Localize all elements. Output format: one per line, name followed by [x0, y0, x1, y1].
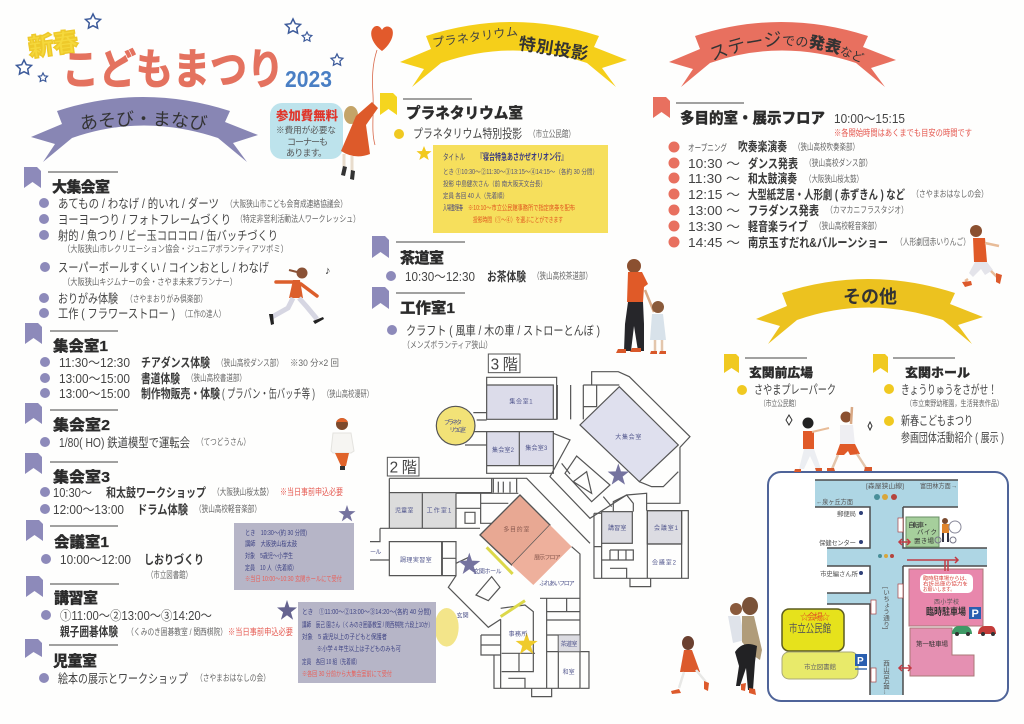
- section: jidoshitsu: 絵本の展示とワークショップ: [58, 672, 188, 686]
- floor plan 3F and 2F: プラネタ: [444, 419, 462, 427]
- section: planetarium room: [380, 93, 575, 141]
- section: shukaishitsu 3: ※当日事前申込必要: [280, 486, 343, 497]
- info box: planetarium: 『寝台特急あさかぜオリオン行』: [477, 151, 567, 162]
- illustration: boy with cap: [331, 418, 354, 470]
- floor plan 3F and 2F: 工作室1: [427, 507, 452, 515]
- info box 1: taiko workshop: ※当日 10:00～10:30 玄関ホールにて受付: [245, 574, 342, 583]
- section: stage schedule: 12:15 ～: [688, 188, 740, 202]
- access map: ←泉ヶ丘方面: [816, 497, 853, 506]
- info box: planetarium: 定員 各回 40 人（先着順）: [443, 191, 508, 200]
- section: stage schedule: （大阪狭山桜太鼓）: [805, 173, 863, 184]
- info box 2: igo class: ※各回 30 分前から大集会室前にて受付: [302, 669, 392, 678]
- section: shukaishitsu 3: （狭山高校軽音楽部）: [195, 503, 261, 514]
- section: daishukaishitsu: スーパーボールすくい / コインおとし / わなげ: [58, 261, 269, 275]
- section: genkan hall: 新春こどもまつり: [901, 414, 973, 428]
- ribbon: asobi manabi: あそび・まなび: [82, 110, 208, 130]
- info box 1: taiko workshop: 講師 大阪狭山桜太鼓: [245, 539, 297, 548]
- title: こどもまつり: [62, 46, 284, 93]
- section: daishukaishitsu: 工作 ( フラワーストロー ): [58, 307, 175, 321]
- section: kaigishitsu 1: （市立図書館）: [147, 569, 192, 580]
- section: shukaishitsu 2: （てつどうさん）: [197, 437, 250, 447]
- info box 2: igo class: [277, 600, 436, 683]
- access map: バイク: [917, 528, 937, 536]
- section: kosakushitsu 1: [372, 287, 600, 350]
- floor plan 3F and 2F: 多目的室: [503, 525, 529, 533]
- section: shukaishitsu 3: （大阪狭山桜太鼓）: [213, 486, 273, 497]
- section: kaigishitsu 1: [26, 520, 204, 580]
- section: jidoshitsu: 児童室: [53, 652, 97, 670]
- parking lots: [909, 569, 983, 626]
- section: stage schedule: ※各開始時間はあくまでも目安の時間です: [834, 127, 972, 138]
- info box 1: taiko workshop: 対象 5歳児～小学生: [245, 551, 293, 560]
- floor plan 3F and 2F: 集会室2: [492, 446, 515, 454]
- section: shukaishitsu 1: （狭山高校書道部）: [187, 372, 246, 383]
- section: stage schedule: フラダンス発表: [748, 203, 819, 218]
- section: planetarium room: （市立公民館）: [529, 128, 575, 139]
- floor plan 3F and 2F: 玄関ホール: [473, 567, 502, 575]
- notice: participation fee: コーナーも: [287, 137, 328, 147]
- section: daishukaishitsu: （工作の達人）: [181, 308, 225, 319]
- section: shukaishitsu 2: 1/80( HO) 鉄道模型で運転会: [59, 435, 190, 450]
- section: sadoshitsu: [372, 236, 592, 284]
- ribbon: stage: ステージでの発表など: [711, 31, 864, 62]
- ribbon: planetarium: 特別投影: [517, 34, 589, 64]
- info box 2: igo class: ※小学 4 年生以上は子どものみも可: [317, 644, 401, 653]
- section: kosakushitsu 1: 工作室1: [400, 299, 455, 317]
- section: planetarium room: プラネタリウム室: [406, 104, 523, 122]
- notice: participation fee: [270, 103, 343, 159]
- access map: 西山台方面→: [882, 660, 890, 695]
- ribbon: planetarium: プラネタリウム: [431, 24, 519, 50]
- section: stage schedule: 南京玉すだれ&バルーンショー: [748, 235, 888, 250]
- access map: 富田林方面→: [920, 481, 957, 490]
- illustration: running child: ♪: [325, 265, 330, 277]
- section: daishukaishitsu: （特定非営利活動法人ワークレッシュ）: [236, 213, 360, 224]
- section: koshushitsu: [26, 576, 293, 639]
- floor plan 3F and 2F: 会議室1: [654, 524, 679, 532]
- section: genkan-mae hiroba: 玄関前広場: [749, 365, 813, 380]
- floor plan 3F and 2F: 調理実習室: [400, 556, 432, 564]
- section: shukaishitsu 1: 11:30～12:30: [59, 356, 130, 370]
- section: stage schedule: 和太鼓演奏: [748, 171, 797, 186]
- section: stage schedule: （さやまおはなしの会）: [912, 188, 988, 199]
- info box 1: taiko workshop: [234, 505, 356, 590]
- section: shukaishitsu 1: 書道体験: [141, 371, 180, 386]
- section: koshushitsu: 親子囲碁体験: [60, 624, 118, 639]
- access map: 郵便局: [837, 509, 856, 518]
- section: stage schedule: [653, 97, 988, 250]
- section: stage schedule: 13:00 ～: [688, 204, 740, 218]
- notice: participation fee: あります。: [286, 148, 327, 158]
- section: koshushitsu: ①11:00～②13:00～③14:20～: [60, 609, 212, 623]
- info box: planetarium: 入場整理券: [443, 203, 463, 212]
- floor plan 3F and 2F: 展示フロア: [534, 554, 561, 561]
- section: koshushitsu: ※当日事前申込必要: [228, 626, 293, 637]
- floor plan 3F and 2F: 会議室2: [652, 559, 677, 567]
- venue: [782, 609, 844, 651]
- section: stage schedule: 14:45 ～: [688, 236, 740, 250]
- info box: planetarium: ※10:10～市立公民館事務所で指定席券を配布: [468, 203, 575, 212]
- section: genkan-mae hiroba: さやまプレーパーク: [754, 383, 836, 397]
- section: kaigishitsu 1: しおりづくり: [144, 552, 204, 567]
- section: shukaishitsu 1: （狭山高校ダンス部）: [217, 357, 283, 368]
- floor plan 3F and 2F: ール: [370, 550, 381, 556]
- 3F: [487, 385, 553, 419]
- section: shukaishitsu 1: （狭山高校漫研）: [323, 388, 373, 399]
- access map: P: [857, 656, 864, 667]
- access map: 置き場: [914, 536, 934, 545]
- title: 2023: [285, 66, 332, 92]
- section: daishukaishitsu: ヨーヨーつり / フォトフレームづくり: [58, 213, 231, 227]
- section: shukaishitsu 2: [25, 403, 250, 450]
- section: genkan hall: 玄関ホール: [905, 365, 971, 380]
- floor plan 3F and 2F: 玄関: [457, 611, 469, 619]
- access map: P: [972, 608, 979, 620]
- section: stage schedule: （狭山高校軽音楽部）: [815, 220, 881, 231]
- section: shukaishitsu 3: ドラム体験: [137, 502, 188, 517]
- section: genkan-mae hiroba: （市立公民館）: [760, 398, 800, 408]
- section: daishukaishitsu: 射的 / 魚つり / ビー玉コロコロ / 缶バッチづくり: [58, 228, 278, 243]
- info box: planetarium: タイトル: [443, 152, 465, 162]
- illustration: running child: [269, 265, 330, 325]
- section: stage schedule: オープニング: [688, 142, 727, 153]
- access map: 保健センター: [819, 538, 856, 547]
- section: stage schedule: 10:00～15:15: [834, 112, 905, 126]
- illustration: mother carrying child: [728, 597, 762, 695]
- section: genkan-mae hiroba: [724, 354, 836, 408]
- access map: 市立図書館: [804, 662, 836, 671]
- section: kaigishitsu 1: 会議室1: [54, 533, 109, 551]
- section: kosakushitsu 1: （メンズボランティア狭山）: [403, 339, 492, 350]
- access map: [森屋狭山線]: [866, 481, 904, 490]
- floor plan 3F and 2F: 集会室1: [509, 397, 533, 405]
- section: stage schedule: 多目的室・展示フロア: [680, 109, 825, 127]
- section: kaigishitsu 1: 10:00～12:00: [60, 553, 131, 567]
- info box: planetarium: とき ①10:30～②11:30～③13:15～④14:15～（各約 30 分間）: [443, 167, 598, 176]
- 2F: [389, 493, 422, 528]
- info box 1: taiko workshop: 定員 10 人（先着順）: [245, 563, 297, 572]
- section: planetarium room: プラネタリウム特別投影: [413, 126, 522, 141]
- section: stage schedule: 軽音楽ライブ: [748, 219, 808, 234]
- section: stage schedule: ダンス発表: [748, 156, 798, 171]
- section: genkan hall: [873, 354, 1004, 445]
- info box 2: igo class: 定員 各回 10 組（先着順）: [302, 657, 360, 666]
- section: daishukaishitsu: （大阪狭山キジムナーの会・さやま未来プランナー）: [63, 276, 237, 287]
- section: stage schedule: 11:30 ～: [688, 172, 740, 186]
- floor plan 3F and 2F: [370, 354, 690, 697]
- section: jidoshitsu: [25, 639, 270, 686]
- floor plan 3F and 2F: 講習室: [608, 524, 626, 532]
- illustration: walking girl: [671, 636, 709, 694]
- section: koshushitsu: （くみのき囲碁教室 / 関西棋院）: [127, 626, 227, 637]
- section: shukaishitsu 1: 13:00～15:00: [59, 387, 130, 401]
- section: daishukaishitsu: 大集会室: [52, 178, 110, 196]
- access map: ☆会場☆: [800, 611, 830, 622]
- floor plan 3F and 2F: 3階: [491, 356, 518, 373]
- info box 2: igo class: とき ①11:00～②13:00～③14:20～(各約 40 分間): [302, 607, 431, 616]
- floor plan 3F and 2F: ふれあいフロア: [539, 580, 575, 587]
- access map: 第一駐車場: [916, 639, 948, 648]
- info box: planetarium: 投影 中島健次さん（前 南大阪天文台長）: [443, 179, 546, 188]
- section: sadoshitsu: 茶道室: [400, 249, 444, 267]
- illustration: two children playing: [786, 407, 872, 472]
- floor plan 3F and 2F: 和室: [563, 668, 575, 676]
- section: shukaishitsu 1: [25, 323, 373, 401]
- info box 2: igo class: 対象 5 歳児以上の子どもと保護者: [302, 632, 387, 641]
- section: stage schedule: （狭山高校ダンス部）: [805, 157, 872, 168]
- access map: 右折出庫の協力を: [923, 580, 968, 588]
- illustration: girl with balloon: [341, 26, 393, 180]
- section: shukaishitsu 1: ※30 分×2 回: [290, 358, 339, 368]
- section: shukaishitsu 3: 和太鼓ワークショップ: [106, 485, 206, 500]
- notice: participation fee: ※費用が必要な: [276, 125, 336, 135]
- floor plan 3F and 2F: 2階: [390, 460, 417, 477]
- title: [16, 14, 343, 93]
- section: daishukaishitsu: あてもの / わなげ / 的いれ / ダーツ: [58, 196, 219, 211]
- floor plan 3F and 2F: 児童室: [395, 507, 413, 515]
- section: koshushitsu: 講習室: [54, 589, 98, 607]
- section: kosakushitsu 1: クラフト ( 風車 / 木の車 / ストローとんぼ ): [406, 324, 600, 338]
- section: daishukaishitsu: （大阪狭山市こども会育成連絡協議会）: [226, 198, 347, 209]
- info box 1: taiko workshop: とき 10:30～(約 30 分間): [245, 528, 307, 537]
- floor plan 3F and 2F: 集会室3: [525, 444, 548, 452]
- info box: planetarium: 投影時間（①～④）を選ぶことができます: [473, 215, 563, 224]
- info box: planetarium: [416, 145, 608, 233]
- section: shukaishitsu 1: チアダンス体験: [141, 355, 210, 370]
- section: daishukaishitsu: （さやまおりがみ倶楽部）: [126, 293, 207, 304]
- section: stage schedule: 13:30 ～: [688, 220, 740, 234]
- access map: お願いします。: [923, 586, 955, 593]
- roads: [815, 480, 987, 695]
- access map: 市史編さん所: [820, 569, 858, 578]
- illustration: runner: [962, 225, 1002, 287]
- access map: [いちょう通り]: [882, 587, 890, 629]
- section: stage schedule: （狭山高校吹奏楽部）: [794, 141, 859, 152]
- ribbon: other: [756, 279, 983, 344]
- section: shukaishitsu 3: 10:30～: [53, 486, 92, 500]
- section: shukaishitsu 1: 13:00～15:00: [59, 372, 130, 386]
- access map: 自転車・: [908, 520, 929, 529]
- access map: 臨時駐車場: [926, 606, 966, 618]
- ribbon: other: その他: [843, 287, 897, 307]
- section: sadoshitsu: （狭山高校茶道部）: [533, 270, 592, 281]
- section: daishukaishitsu: （大阪狭山市レクリエーション協会・ジュニアボランティアツボミ）: [63, 243, 288, 254]
- ribbon: planetarium: [400, 22, 627, 87]
- bicycle parking: [906, 517, 939, 547]
- arrows: [899, 539, 958, 571]
- section: shukaishitsu 1: ( プラバン・缶バッチ等 ): [222, 386, 315, 401]
- section: shukaishitsu 1: 制作物販売・体験: [141, 386, 220, 401]
- floor plan 3F and 2F: 事務所: [509, 630, 527, 638]
- section: shukaishitsu 3: 集会室3: [53, 468, 110, 486]
- section: stage schedule: 吹奏楽演奏: [738, 139, 787, 154]
- floor plan 3F and 2F: 大集会室: [615, 433, 641, 441]
- info box 2: igo class: 講師 辰己 園さん（くみのき囲碁教室 / 関西棋院 六段上10か）: [302, 620, 433, 629]
- section: sadoshitsu: お茶体験: [487, 269, 526, 284]
- notice: participation fee: 参加費無料: [276, 108, 338, 123]
- access map: 臨時駐車場からは、: [923, 575, 970, 582]
- floor plan 3F and 2F: 茶道室: [561, 640, 577, 648]
- illustration: parent and child: [616, 259, 666, 354]
- section: stage schedule: （カマカニフラスタジオ）: [826, 205, 908, 215]
- section: jidoshitsu: （さやまおはなしの会）: [196, 672, 270, 683]
- floor plan 3F and 2F: リウム室: [449, 426, 466, 434]
- section: stage schedule: 10:30 ～: [688, 157, 740, 171]
- access map: 西小学校: [934, 598, 959, 606]
- ribbon: asobi manabi: [31, 97, 258, 162]
- title: 新春: [27, 28, 80, 62]
- access map: 市立公民館: [789, 621, 831, 635]
- section: shukaishitsu 3: [25, 453, 343, 517]
- section: daishukaishitsu: [24, 167, 360, 321]
- section: sadoshitsu: 10:30～12:30: [405, 270, 475, 284]
- access map: [768, 472, 1008, 701]
- section: stage schedule: 大型紙芝居・人形劇 ( 赤ずきん ) など: [748, 187, 905, 202]
- section: shukaishitsu 1: 集会室1: [53, 337, 108, 355]
- section: shukaishitsu 3: 12:00～13:00: [53, 503, 124, 517]
- ribbon: stage: [669, 22, 896, 87]
- section: daishukaishitsu: おりがみ体験: [58, 291, 118, 306]
- section: stage schedule: （人形劇団赤いりんご）: [896, 236, 970, 247]
- section: shukaishitsu 2: 集会室2: [53, 416, 110, 434]
